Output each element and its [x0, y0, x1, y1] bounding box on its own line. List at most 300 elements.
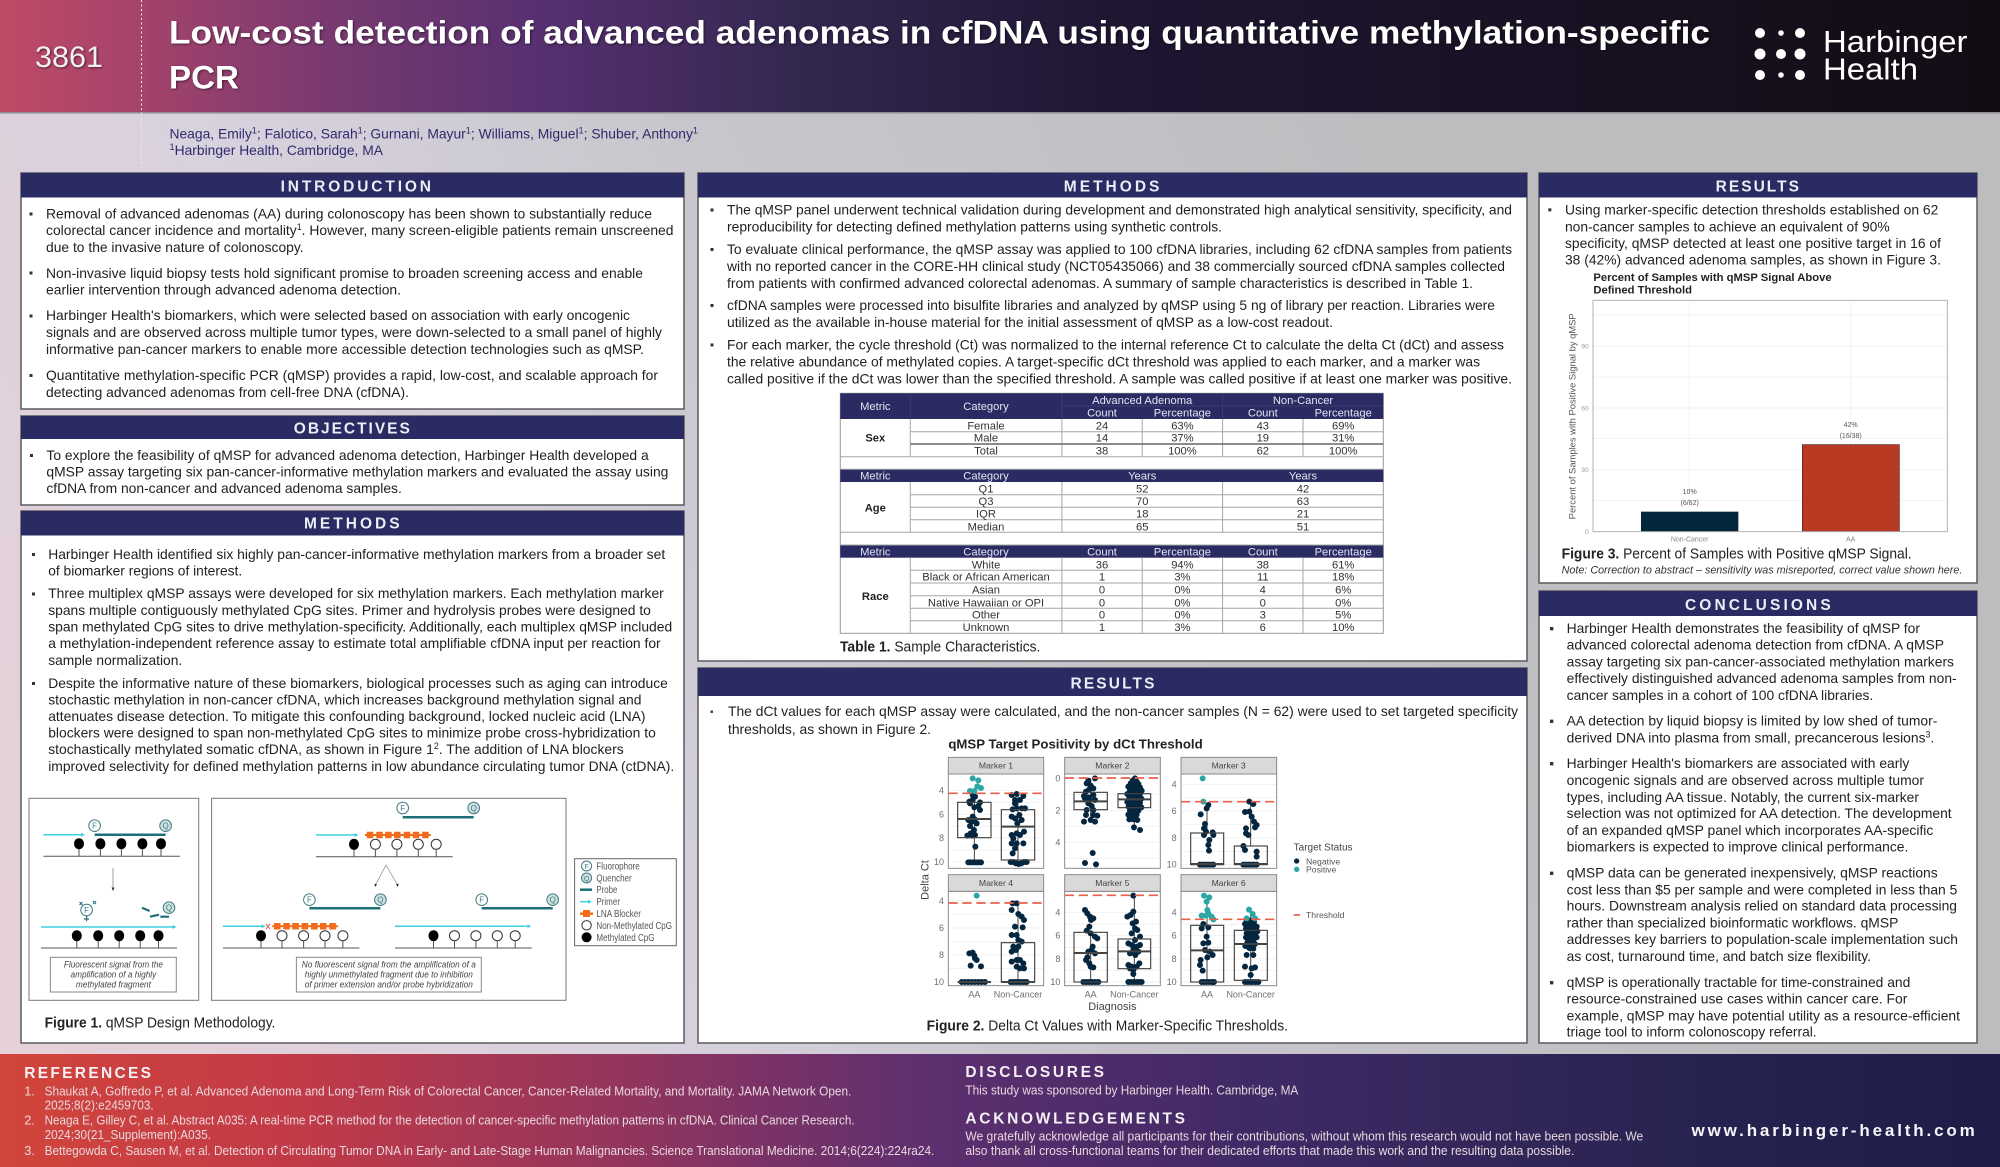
results bullet: Using marker-specific detection thresholds established on 62 — [1565, 202, 1939, 218]
table 1: sample characteristics: 1 — [1099, 572, 1105, 584]
introduction bullets: due to the invasive nature of colonoscopy. — [46, 239, 304, 255]
table 1: sample characteristics: Count — [1248, 407, 1279, 419]
heading: results: RESULTS — [1070, 676, 1154, 692]
introduction bullets: 1 — [297, 222, 302, 232]
facet: marker 1 — [934, 757, 1044, 868]
panel: conclusions — [1539, 591, 1977, 1043]
figure 1: qMSP design, methylated fragment: Fluorescent signal from the — [64, 959, 163, 970]
figure 1 legend: LNA Blocker — [596, 909, 642, 920]
table 1: sample characteristics: Percentage — [1315, 407, 1372, 419]
methods bullets: stochastically methylated somatic cfDNA, as shown in Figure 1 — [48, 741, 437, 757]
references: Neaga E, Gilley C, et al. Abstract A035: A real-time PCR method for the detection of cancer-specific methylation patterns in cfDNA. Clinical Cancer Research. — [45, 1112, 855, 1128]
table 1: sample characteristics: Advanced Adenoma — [1092, 395, 1193, 407]
table 1: sample characteristics: 18% — [1332, 572, 1354, 584]
methods bullets: of biomarker regions of interest. — [48, 562, 242, 578]
figure 3: bar chart: 60 — [1581, 405, 1589, 412]
figure 1: qMSP design, methylated fragment: Q — [162, 822, 169, 831]
methods bullets: For each marker, the cycle threshold (Ct) was normalized to the internal reference Ct to calculate the delta Ct (dCt) and assess — [727, 336, 1504, 352]
chart legend: Target Status — [1294, 842, 1353, 853]
conclusions bullets: resource-constrained use cases within cancer care. For — [1567, 990, 1908, 1006]
table 1: sample characteristics: 100% — [1168, 446, 1197, 458]
figure 1 caption: Figure 1. qMSP Design Methodology. — [45, 1016, 275, 1032]
methods bullets: from patients with confirmed advanced colorectal adenomas. A summary of sample characteristics is described in Table 1. — [727, 275, 1473, 291]
facet: marker 4: Non-Cancer — [994, 990, 1042, 1000]
authors and affiliation: ; Shuber, Anthony — [584, 126, 693, 142]
disclosures: DISCLOSURES — [965, 1064, 1104, 1081]
figure 1: qMSP design, methylated fragment: Q — [166, 904, 172, 913]
chart legend: Threshold — [1306, 910, 1345, 920]
table 1: sample characteristics: 0 — [1099, 584, 1105, 596]
table 1: sample characteristics: 14 — [1096, 433, 1108, 445]
figure 3: bar chart: 0 — [1585, 529, 1589, 536]
figure 1 legend: Fluorophore — [596, 862, 640, 872]
facet: marker 3: 6 — [1172, 806, 1177, 816]
conclusions bullets: assay targeting six pan-cancer-associated methylation markers — [1567, 653, 1954, 669]
facet: marker 2: 4 — [1055, 837, 1060, 847]
facet: marker 3: 4 — [1172, 779, 1177, 789]
facet: marker 1: Marker 1 — [979, 761, 1013, 771]
figure 1: qMSP design, unmethylated fragment: highly unmethylated fragment due to inhibition — [305, 969, 473, 980]
table 1: sample characteristics: Category — [963, 401, 1009, 413]
table 1: sample characteristics: 70 — [1136, 496, 1148, 508]
methods bullets: cfDNA samples were processed into bisulfite libraries and analyzed by qMSP using 5 ng of library per reaction. Libraries were — [727, 297, 1495, 313]
panel: results (middle) — [698, 668, 1527, 1043]
chart title — [1593, 272, 1832, 296]
figure 1 legend: Quencher — [596, 874, 632, 884]
methods bullets: attenuates disease detection. To mitigate this confounding background, locked nucleic acid (LNA) — [48, 708, 645, 724]
facet: marker 5: Marker 5 — [1095, 878, 1130, 888]
methods bullets — [32, 546, 674, 774]
table 1: sample characteristics: 3% — [1174, 572, 1191, 584]
table 1: sample characteristics: Metric — [860, 471, 891, 483]
heading: methods: METHODS — [304, 516, 400, 532]
objectives bullet: To explore the feasibility of qMSP for advanced adenoma detection, Harbinger Health developed a — [46, 447, 649, 463]
conclusions bullets: cancer samples in a cohort of 100 cfDNA libraries. — [1567, 687, 1873, 703]
facet: marker 4: Marker 4 — [979, 878, 1013, 888]
facet: marker 3: Marker 3 — [1212, 761, 1246, 771]
references: 1. — [24, 1084, 35, 1098]
objectives bullet — [30, 447, 668, 496]
table 1: sample characteristics: Asian — [972, 584, 1000, 596]
references: 2025;8(2):e2459703. — [45, 1098, 154, 1112]
panel: results (right) — [1539, 173, 1977, 583]
table 1: sample characteristics: 100% — [1329, 446, 1358, 458]
table 1: sample characteristics: 5% — [1335, 610, 1351, 622]
table 1: sample characteristics: 10% — [1332, 622, 1354, 634]
table 1: sample characteristics: 4 — [1260, 584, 1266, 596]
table 1: sample characteristics: Total — [974, 446, 998, 458]
acknowledgements: We gratefully acknowledge all participants for their contributions, without whom this research would not have been possible. We — [965, 1128, 1643, 1144]
chart legend: Negative — [1306, 856, 1340, 866]
authors and affiliation — [170, 126, 698, 158]
table 1: sample characteristics: 0% — [1335, 597, 1351, 609]
conclusions bullets: derived DNA into plasma from small, precancerous lesions — [1567, 729, 1929, 745]
facet: marker 5: 6 — [1055, 931, 1060, 941]
logo: Harbinger Health — [1754, 24, 1968, 86]
table 1: sample characteristics: Count — [1087, 407, 1118, 419]
facet: marker 1: 10 — [934, 857, 944, 867]
conclusions bullets: hours. Downstream analysis relied on standard data processing — [1567, 898, 1957, 914]
table 1: sample characteristics: 24 — [1096, 420, 1108, 432]
introduction bullets — [30, 206, 674, 400]
introduction bullets: Non-invasive liquid biopsy tests hold significant promise to broaden screening access and enable — [46, 265, 643, 281]
conclusions bullets: Harbinger Health demonstrates the feasibility of qMSP for — [1567, 620, 1920, 636]
table 1: sample characteristics: 65 — [1136, 522, 1148, 534]
table 1: sample characteristics: 31% — [1332, 433, 1354, 445]
poster number: 3861 — [35, 41, 103, 74]
table 1: sample characteristics: 0% — [1174, 597, 1191, 609]
disclosures: This study was sponsored by Harbinger Health. Cambridge, MA — [965, 1082, 1299, 1098]
table 1: sample characteristics: Percentage — [1154, 407, 1211, 419]
figure 3: bar chart: 90 — [1581, 343, 1589, 350]
panel: methods (middle) — [698, 173, 1527, 661]
introduction bullets: informative pan-cancer markers to enable more accessible detection technologies such as qMSP. — [46, 341, 644, 357]
table 1: sample characteristics: 69% — [1332, 420, 1354, 432]
methods bullets: utilized as the available in-house material for the initial assessment of qMSP as a low-cost readout. — [727, 314, 1333, 330]
facet: marker 6: 6 — [1172, 931, 1177, 941]
methods bullets: sample normalization. — [48, 652, 182, 668]
table 1: sample characteristics: 0 — [1099, 610, 1105, 622]
methods bullets: spans multiple contiguously methylated CpG sites. Primer and hydrolysis probes were designed to — [48, 602, 651, 618]
facet: marker 1: 8 — [939, 833, 944, 843]
authors and affiliation: ; Falotico, Sarah — [257, 126, 358, 142]
table 1: sample characteristics: 42 — [1297, 484, 1309, 496]
introduction bullets: Harbinger Health's biomarkers, which were selected based on association with early oncogenic — [46, 307, 630, 323]
figure 3: bar chart: Non-Cancer — [1671, 536, 1709, 543]
logo: Harbinger Health: Harbinger — [1823, 24, 1968, 59]
facet: marker 4: 8 — [939, 950, 944, 960]
figure 2: delta Ct boxplots — [920, 737, 1353, 1034]
table 1: sample characteristics: Percentage — [1315, 546, 1372, 558]
title: Low-cost detection of advanced adenomas in cfDNA using quantitative methylation-specific — [169, 14, 1710, 50]
facet: marker 4: AA — [968, 990, 980, 1000]
figure 1 legend: Probe — [596, 885, 618, 896]
authors and affiliation: 1 — [579, 126, 584, 136]
table 1: sample characteristics: 3% — [1174, 622, 1191, 634]
table 1: sample characteristics: 38 — [1257, 559, 1269, 571]
table 1: sample characteristics: Category — [963, 546, 1009, 558]
figure 3: bar chart — [1568, 272, 1947, 543]
methods bullets: improved selectivity for defined methylation patterns in low abundance circulating tumor DNA (ctDNA). — [48, 758, 674, 774]
heading: results: RESULTS — [1716, 178, 1799, 196]
methods bullets: a methylation-independent reference assay to estimate total amplifiable cfDNA input per reaction for — [48, 635, 661, 651]
table 1: sample characteristics: Q3 — [979, 496, 993, 508]
introduction bullets: Quantitative methylation-specific PCR (qMSP) provides a rapid, low-cost, and scalable approach for — [46, 367, 658, 383]
table 1: sample characteristics: White — [972, 559, 1000, 571]
chart title: Defined Threshold — [1593, 284, 1692, 296]
panel: methods (left) — [21, 511, 684, 1043]
facet: marker 3: 10 — [1167, 860, 1177, 870]
methods bullets — [710, 202, 1512, 386]
conclusions bullets: Harbinger Health's biomarkers are associated with early — [1567, 755, 1909, 771]
figure 2 caption: Figure 2. Delta Ct Values with Marker-Specific Thresholds. — [927, 1018, 1288, 1034]
references: Bettegowda C, Sausen M, et al. Detection of Circulating Tumor DNA in Early- and Late-Stage Human Malignancies. Science Translational Medicine. 2014;6(224):224ra24. — [45, 1143, 934, 1158]
table 1 caption: Table 1. Sample Characteristics. — [840, 640, 1040, 656]
figure 3: bar chart: 10% — [1683, 489, 1697, 496]
table 1: sample characteristics: 52 — [1136, 484, 1148, 496]
facet: marker 2: 2 — [1055, 805, 1060, 815]
website: www.harbinger-health.com — [1690, 1121, 1975, 1140]
table 1: sample characteristics: 36 — [1096, 559, 1108, 571]
table 1: sample characteristics: 3 — [1260, 610, 1266, 622]
table 1: sample characteristics: 11 — [1257, 572, 1269, 584]
figure 1: qMSP design, unmethylated fragment: Q — [471, 804, 477, 813]
conclusions bullets: as cost, turnaround time, and batch size flexibility. — [1567, 948, 1871, 964]
figure 1: qMSP design, unmethylated fragment: of primer extension and/or probe hybridization — [305, 979, 473, 990]
figure 3 caption: Figure 3. Percent of Samples with Positive qMSP Signal. — [1562, 547, 1912, 563]
acknowledgements: ACKNOWLEDGEMENTS — [965, 1111, 1185, 1128]
table 1: sample characteristics: Years — [1289, 471, 1318, 483]
conclusions bullets: triage tool to inform colonoscopy referral. — [1567, 1024, 1817, 1040]
table 1: sample characteristics: 51 — [1297, 522, 1309, 534]
methods bullets: Despite the informative nature of these biomarkers, biological processes such as aging can introduce — [48, 675, 668, 691]
table 1: sample characteristics: Count — [1248, 546, 1279, 558]
heading: introduction: INTRODUCTION — [281, 178, 431, 196]
facet: marker 3 — [1167, 757, 1277, 870]
facet: marker 5: AA — [1085, 990, 1097, 1000]
facet: marker 5: 10 — [1050, 977, 1060, 987]
panel: objectives — [21, 416, 684, 505]
acknowledgements — [965, 1111, 1643, 1158]
methods bullets: stochastic methylation in non-cancer cfDNA, which increases background methylation signal and — [48, 692, 641, 708]
table 1: sample characteristics: 38 — [1096, 446, 1108, 458]
facet: marker 5 — [1050, 875, 1160, 1000]
chart legend — [1294, 842, 1353, 920]
table 1: sample characteristics: 63% — [1171, 420, 1194, 432]
table 1: sample characteristics: 19 — [1257, 433, 1269, 445]
conclusions bullets: addresses key barriers to population-scale implementation such — [1567, 931, 1958, 947]
figure 1: qMSP design, methylated fragment: methylated fragment — [76, 979, 151, 990]
authors and affiliation: Neaga, Emily — [170, 126, 250, 142]
heading: conclusions: CONCLUSIONS — [1685, 597, 1831, 614]
table 1: sample characteristics: Median — [968, 522, 1004, 534]
facet: marker 5: 8 — [1055, 954, 1060, 964]
facet: marker 2: 0 — [1055, 773, 1060, 783]
figure 3: bar chart: Percent of Samples with Positive Signal by qMSP — [1568, 313, 1578, 519]
introduction bullets: earlier intervention through advanced adenoma detection. — [46, 282, 401, 298]
figure 1: qMSP design, unmethylated fragment — [212, 798, 566, 1000]
facet: marker 6 — [1167, 875, 1277, 1000]
footer band — [0, 1054, 2000, 1167]
table 1: sample characteristics: Other — [972, 610, 1000, 622]
figure 1 legend: Primer — [596, 897, 621, 908]
table 1: sample characteristics: 0 — [1099, 597, 1105, 609]
references: REFERENCES — [24, 1065, 151, 1082]
table 1: sample characteristics — [840, 393, 1383, 634]
bar: non-cancer 10% — [1641, 512, 1738, 532]
figure 3: bar chart: AA — [1846, 536, 1856, 543]
figure 1: qMSP design, unmethylated fragment: Q — [550, 896, 556, 905]
conclusions bullets: types, including AA tissue. Notably, the current six-marker — [1567, 789, 1919, 805]
table 1: sample characteristics: 37% — [1171, 433, 1194, 445]
methods bullets: . The addition of LNA blockers — [439, 741, 624, 757]
table 1: sample characteristics: 1 — [1099, 622, 1105, 634]
figure 1: qMSP design, unmethylated fragment: F — [400, 804, 405, 813]
objectives bullet: qMSP assay targeting six pan-cancer-informative methylation markers and evaluated the assay using — [46, 464, 668, 480]
figure 1: qMSP design, methylated fragment: F — [84, 906, 89, 915]
facet: marker 4: 10 — [934, 977, 944, 987]
figure 1: qMSP design, methylated fragment: amplification of a highly — [71, 969, 157, 980]
references — [24, 1065, 934, 1158]
authors and affiliation: 1 — [693, 126, 698, 136]
conclusions bullets: 3 — [1926, 729, 1930, 739]
disclosures — [965, 1064, 1299, 1098]
acknowledgements: also thank all cross-functional teams for their dedicated efforts that made this work and the resulting data possible. — [965, 1143, 1574, 1158]
panel: introduction — [21, 173, 684, 409]
references: 2. — [24, 1112, 35, 1128]
table 1: sample characteristics: Unknown — [963, 622, 1009, 634]
results bullet: thresholds, as shown in Figure 2. — [728, 721, 931, 737]
figure 1 legend: Q — [584, 876, 590, 883]
methods bullets: 2 — [434, 741, 439, 751]
results bullet: The dCt values for each qMSP assay were calculated, and the non-cancer samples (N = 62) were used to set targeted specificity — [728, 703, 1518, 719]
methods bullets: The qMSP panel underwent technical validation during development and demonstrated high analytical sensitivity, specificity, and — [727, 202, 1512, 218]
chart legend: Positive — [1306, 864, 1336, 874]
references: 2024;30(21_Supplement):A035. — [45, 1127, 211, 1142]
facet: marker 2: Marker 2 — [1095, 761, 1130, 771]
figure 1 legend — [575, 859, 676, 946]
results text and figure 3 — [1548, 202, 1962, 576]
figure 3: bar chart: (6/62) — [1681, 500, 1699, 507]
figure 1 legend: Methylated CpG — [596, 933, 655, 944]
bar: AA 42% — [1802, 445, 1899, 532]
table 1: sample characteristics: Percentage — [1154, 546, 1211, 558]
conclusions bullets: of an expanded qMSP panel which incorporates AA-specific — [1567, 822, 1933, 838]
table 1: sample characteristics: 18 — [1136, 508, 1148, 520]
objectives bullet: cfDNA from non-cancer and advanced adenoma samples. — [46, 480, 402, 496]
results bullet — [710, 703, 1518, 737]
heading: methods: METHODS — [1064, 178, 1159, 196]
introduction bullets: Removal of advanced adenomas (AA) during colonoscopy has been shown to substantially reduce — [46, 206, 652, 222]
conclusions bullets: qMSP is operationally tractable for time-constrained and — [1567, 974, 1910, 990]
methods bullets: with no reported cancer in the CORE-HH clinical study (NCT05435066) and 38 commercially sourced cfDNA samples collected — [726, 258, 1505, 274]
introduction bullets: detecting advanced adenomas from cell-free DNA (cfDNA). — [46, 384, 409, 400]
table 1: sample characteristics: Age — [865, 503, 886, 515]
table 1: sample characteristics: 94% — [1171, 559, 1194, 571]
results bullet: non-cancer samples to achieve an equivalent of 90% — [1565, 218, 1890, 234]
table 1: sample characteristics: 0 — [1260, 597, 1266, 609]
heading: objectives: OBJECTIVES — [294, 420, 410, 438]
facet: marker 1: 6 — [939, 809, 944, 819]
authors and affiliation: 1 — [358, 126, 363, 136]
table 1: sample characteristics: Metric — [860, 546, 891, 558]
figure 1: qMSP design, unmethylated fragment: F — [307, 896, 312, 905]
authors and affiliation: 1 — [466, 126, 471, 136]
table 1: sample characteristics: Black or African American — [922, 572, 1050, 584]
facet: marker 6: AA — [1201, 990, 1213, 1000]
conclusions bullets: advanced colorectal adenoma detection from cfDNA. A qMSP — [1567, 637, 1944, 653]
figure 3: bar chart: (16/38) — [1840, 433, 1862, 440]
figure 1: qMSP design, methylated fragment — [29, 798, 199, 1000]
conclusions bullets: cost less than $5 per sample and were completed in less than 5 — [1567, 881, 1958, 897]
conclusions bullets: biomarkers is expected to improve clinical performance. — [1567, 838, 1908, 854]
methods bullets: To evaluate clinical performance, the qMSP assay was applied to 100 cfDNA libraries, including 62 cfDNA samples from patients — [727, 241, 1512, 257]
authors and affiliation: 1 — [170, 142, 175, 152]
figure 1 legend: F — [584, 864, 589, 871]
table 1: sample characteristics: Female — [967, 420, 1005, 432]
authors and affiliation: Harbinger Health, Cambridge, MA — [175, 143, 384, 158]
facet: marker 4: 4 — [939, 896, 944, 906]
facet: marker 6: 8 — [1172, 954, 1177, 964]
conclusions bullets: effectively distinguished advanced adenoma samples from non- — [1567, 670, 1957, 686]
table 1: sample characteristics: 62 — [1257, 446, 1269, 458]
facet: marker 4 — [934, 875, 1044, 1000]
methods bullets: Harbinger Health identified six highly pan-cancer-informative methylation markers from a broader set — [48, 546, 665, 562]
table 1: sample characteristics: Race — [862, 591, 889, 603]
table 1: sample characteristics: 6 — [1260, 622, 1266, 634]
table 1: sample characteristics: IQR — [976, 508, 996, 520]
results bullet — [1548, 202, 1941, 268]
table 1: sample characteristics: 21 — [1297, 508, 1309, 520]
results bullet: specificity, qMSP detected at least one positive target in 16 of — [1565, 235, 1941, 251]
facet: marker 2 — [1055, 757, 1160, 868]
methods bullets: blockers were designed to span non-methylated CpG sites to minimize probe cross-hybridization to — [48, 724, 656, 740]
table 1: sample characteristics: Category — [963, 471, 1009, 483]
figure 1 legend: Non-Methylated CpG — [596, 921, 672, 932]
chart title: Percent of Samples with qMSP Signal Above — [1593, 272, 1832, 284]
figure 1: qMSP design, methylated fragment: F — [92, 822, 97, 831]
correction note: Note: Correction to abstract – sensitivity was misreported, correct value shown here. — [1562, 564, 1962, 576]
conclusions bullets: example, qMSP may have potential utility as a resource-efficient — [1567, 1007, 1960, 1023]
table 1: sample characteristics: 61% — [1332, 559, 1354, 571]
conclusions bullets: AA detection by liquid biopsy is limited by low shed of tumor- — [1567, 713, 1938, 729]
authors and affiliation: ; Gurnani, Mayur — [363, 126, 466, 142]
methods bullets: reproducibility for detecting defined methylation patterns using synthetic controls. — [727, 218, 1222, 234]
x axis label: Diagnosis — [1088, 1001, 1137, 1013]
conclusions bullets: selection was not optimized for AA detection. The development — [1567, 805, 1952, 821]
figure 3: bar chart: 30 — [1581, 467, 1589, 474]
facet: marker 3: 8 — [1172, 833, 1177, 843]
introduction bullets: signals and are observed across multiple tumor types, were down-selected to a small panel of highly — [46, 324, 662, 340]
introduction bullets: . However, many screen-eligible patients remain unscreened — [302, 222, 674, 238]
figure 1: qMSP design, unmethylated fragment: F — [479, 896, 484, 905]
facet: marker 5: Non-Cancer — [1110, 990, 1159, 1000]
table 1: sample characteristics: Count — [1087, 546, 1118, 558]
facet: marker 4: 6 — [939, 923, 944, 933]
figure 1: qMSP design, unmethylated fragment: Q — [377, 896, 384, 905]
table 1: sample characteristics: Q1 — [979, 484, 993, 496]
methods bullets: Three multiplex qMSP assays were developed for six methylation markers. Each methylation marker — [48, 585, 664, 601]
conclusions bullets — [1550, 620, 1960, 1040]
table 1: sample characteristics: 0% — [1174, 610, 1191, 622]
facet: marker 5: 4 — [1055, 907, 1060, 917]
figure 1: qMSP design, unmethylated fragment: No fluorescent signal from the amplification of a — [302, 959, 476, 970]
table 1: sample characteristics: Metric — [860, 401, 891, 413]
table 1: sample characteristics: Male — [974, 433, 998, 445]
introduction bullets: colorectal cancer incidence and mortality — [46, 222, 299, 238]
table 1: sample characteristics: Native Hawaiian or OPI — [928, 597, 1044, 609]
conclusions bullets: oncogenic signals and are observed across multiple tumor — [1567, 772, 1924, 788]
facet: marker 6: 10 — [1167, 977, 1177, 987]
table 1: sample characteristics: 43 — [1257, 420, 1269, 432]
facet: marker 1: 4 — [939, 785, 944, 795]
table 1: sample characteristics: Non-Cancer — [1273, 395, 1333, 407]
conclusions bullets: rather than specialized bioinformatic workflows. qMSP — [1567, 915, 1898, 931]
facet: marker 6: 4 — [1172, 908, 1177, 918]
y axis label: Delta Ct — [920, 860, 932, 900]
methods bullets: the relative abundance of methylated copies. A target-specific dCt threshold was applied to each marker, and a marker was — [727, 354, 1480, 370]
table 1: sample characteristics: 6% — [1335, 584, 1351, 596]
conclusions bullets: qMSP data can be generated inexpensively, qMSP reactions — [1567, 865, 1938, 881]
title: PCR — [169, 60, 239, 96]
authors and affiliation: ; Williams, Miguel — [471, 126, 579, 142]
header banner — [0, 0, 2000, 168]
methods bullets: span methylated CpG sites to drive methylation-specificity. Additionally, each multiplex qMSP included — [48, 618, 672, 634]
facet: marker 6: Non-Cancer — [1226, 990, 1275, 1000]
conclusions bullets: . — [1930, 729, 1934, 745]
logo: Harbinger Health: Health — [1823, 52, 1918, 86]
title — [169, 14, 1710, 96]
